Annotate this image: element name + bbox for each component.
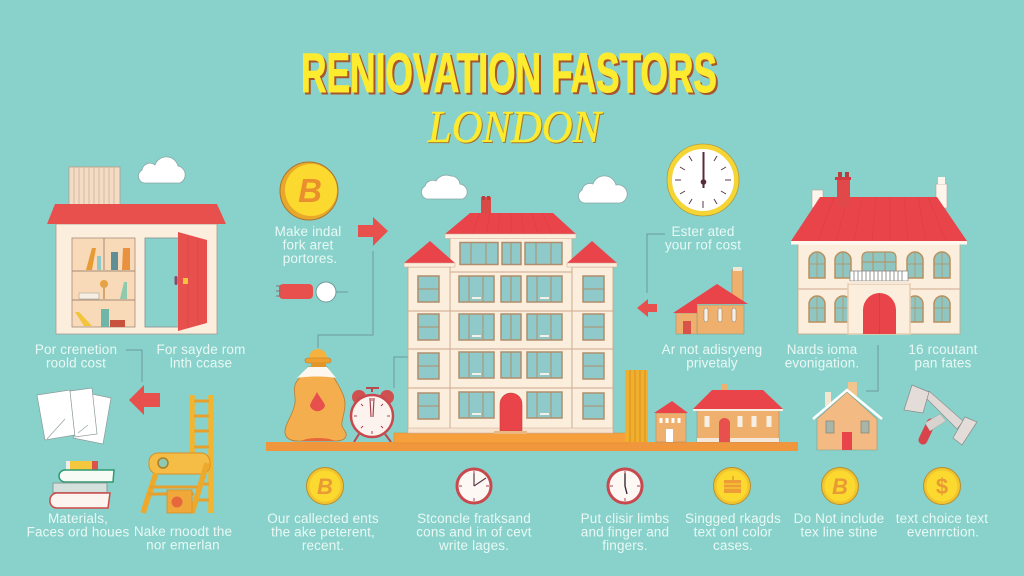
connector: caption to arrow xyxy=(647,234,665,293)
text: caption 5: Do Not include xyxy=(794,511,884,526)
icon: tiny house xyxy=(654,401,688,442)
icon: bitcoin coin large: B xyxy=(298,172,322,209)
right gable roof xyxy=(567,241,617,267)
front door xyxy=(494,393,527,434)
text: cost caption 2: For sayde rom xyxy=(157,342,245,357)
text: caption 6: evenrrction. xyxy=(907,524,979,540)
striped chimney xyxy=(69,167,120,205)
icon: red tube with ball xyxy=(276,282,348,302)
arrow: left red xyxy=(129,385,160,415)
text: caption 2: Stconcle fratksand xyxy=(417,511,531,526)
icon: bitcoin coin 1: B xyxy=(317,474,333,499)
text: cost caption 1: Por crenetion xyxy=(35,342,117,357)
text: advisory caption: privetaly xyxy=(686,356,738,370)
text: materials caption: Materials, xyxy=(48,511,108,526)
connector: clock to building xyxy=(394,357,408,388)
text: caption 2: cons and in of cevt xyxy=(416,524,532,540)
text: caption 3: Put clisir limbs xyxy=(581,511,669,526)
balcony xyxy=(849,271,909,284)
icon: clock 1 xyxy=(457,469,491,503)
icon: bitcoin coin 1 xyxy=(306,468,344,504)
text: renovation caption: Nards ioma xyxy=(787,342,858,357)
title: RENIOVATION FASTORS xyxy=(303,43,719,106)
arrow: left red small xyxy=(637,299,657,317)
doorway xyxy=(145,238,179,327)
icon: paper sheets xyxy=(37,388,111,444)
text: caption 1: recent. xyxy=(302,538,344,553)
arched windows xyxy=(809,252,950,322)
roof xyxy=(791,197,967,241)
text: make caption: nor emerlan xyxy=(146,538,220,552)
connector: caption to arrow xyxy=(126,350,142,382)
text: make indal caption: portores. xyxy=(283,251,337,266)
text: cost caption 2: lnth ccase xyxy=(170,356,232,370)
shelf platform xyxy=(266,433,798,451)
icon: small brick house xyxy=(673,267,748,334)
building walls xyxy=(408,238,613,433)
text: make indal caption: fork aret xyxy=(283,238,334,252)
text: make caption: Nake rnoodt the xyxy=(134,524,232,539)
title xyxy=(301,41,719,106)
text: caption 6: text choice text xyxy=(896,511,988,526)
icon: stack of books xyxy=(50,461,114,508)
main chimney xyxy=(481,196,491,224)
panel: cutaway house xyxy=(47,167,226,334)
walls xyxy=(791,241,967,334)
icon: dollar coin: $ xyxy=(936,474,948,499)
panel: main apartment building xyxy=(404,196,617,434)
text: estimated cost caption: Ester ated xyxy=(671,224,735,239)
connector: caption to cottage xyxy=(866,345,878,391)
icon: cloud left xyxy=(138,157,185,183)
text: caption 5: tex line stine xyxy=(800,524,878,540)
text: caption 1: the ake peterent, xyxy=(271,524,375,540)
text: caption 4: cases. xyxy=(713,538,753,553)
house wall xyxy=(56,224,217,334)
icon: orange bottle xyxy=(285,349,346,441)
icon: ladder and roller xyxy=(143,395,211,513)
subtitle: LONDON xyxy=(427,102,604,152)
main roof xyxy=(445,213,576,238)
icon: dollar coin xyxy=(924,468,960,504)
icon: cloud centre left xyxy=(421,175,467,199)
arrow: right red xyxy=(358,217,388,246)
windows xyxy=(418,242,604,419)
text: make indal caption: Make indal xyxy=(275,224,341,239)
text: caption 3: fingers. xyxy=(602,538,648,553)
icon: hammer xyxy=(904,385,977,445)
left gable roof xyxy=(404,241,455,267)
portico xyxy=(848,284,910,334)
text: caption 3: and finger and xyxy=(581,524,669,540)
roof xyxy=(47,204,226,224)
text: advisory caption: Ar not adisryeng xyxy=(662,342,762,357)
icon: bitcoin coin 2: B xyxy=(832,474,848,499)
text: materials caption: Faces ord houes xyxy=(27,524,130,540)
bookshelf xyxy=(72,238,135,327)
icon: cottage xyxy=(813,382,882,450)
icon: clock 2 xyxy=(608,469,642,503)
icon: striped timber xyxy=(625,370,648,442)
subtitle: LONDON xyxy=(428,103,605,153)
red chimney xyxy=(835,172,851,207)
text: cost caption 1: roold cost xyxy=(46,356,106,370)
icon: wall clock xyxy=(667,144,739,216)
panel: large manor house xyxy=(791,172,967,334)
icon: cloud centre right xyxy=(578,176,627,203)
text: accountant caption: 16 rcoutant xyxy=(908,342,978,357)
icon: alarm clock xyxy=(351,388,394,442)
text: accountant caption: pan fates xyxy=(915,356,972,370)
icon: long house xyxy=(693,384,783,442)
text: caption 1: Our callected ents xyxy=(267,511,379,526)
connector: tube to bottle xyxy=(318,251,373,348)
text: estimated cost caption: your rof cost xyxy=(665,238,741,252)
text: caption 4: text onl color xyxy=(694,524,773,540)
title: RENIOVATION FASTORS xyxy=(301,41,717,104)
red door xyxy=(174,232,207,331)
double door xyxy=(863,293,896,334)
white chimneys xyxy=(812,177,947,208)
text: caption 4: Singged rkagds xyxy=(685,511,781,526)
text: renovation caption: evonigation. xyxy=(785,356,859,370)
text: caption 2: write lages. xyxy=(438,538,509,553)
icon: coin with cake xyxy=(714,468,750,504)
icon: bitcoin coin large xyxy=(280,162,338,220)
icon: bitcoin coin 2 xyxy=(822,468,858,504)
